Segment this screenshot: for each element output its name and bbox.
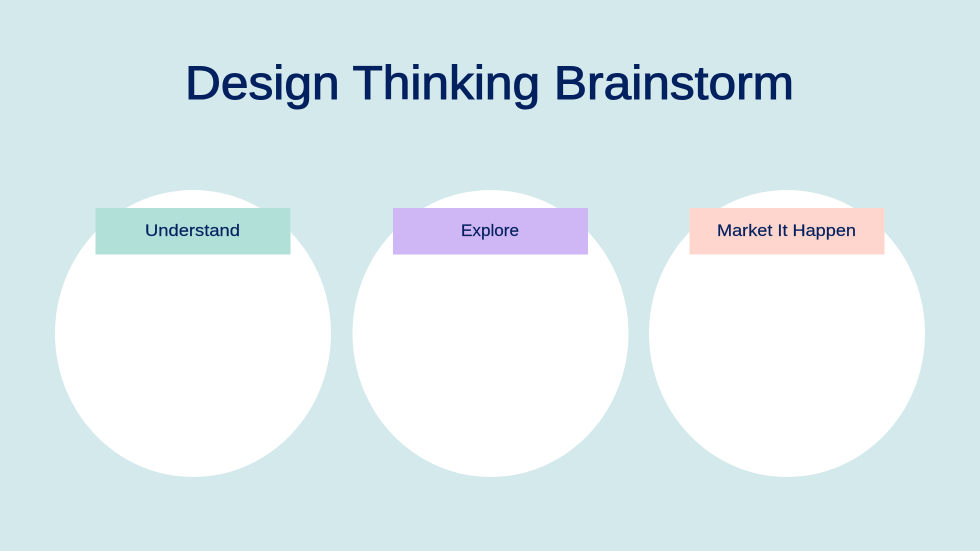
circle: understand	[55, 190, 331, 477]
circle: explore	[352, 190, 628, 477]
label box: explore	[393, 208, 588, 254]
circle: market it happen	[649, 190, 925, 477]
label box: understand	[96, 208, 290, 254]
panel: explore	[352, 190, 628, 477]
label text: market it happen: Market It Happen	[717, 221, 856, 240]
label box: market it happen	[690, 208, 884, 254]
label text: explore: Explore	[461, 221, 519, 240]
panel: understand	[55, 190, 331, 477]
label text: understand: Understand	[145, 221, 240, 240]
title: Design Thinking Brainstorm	[185, 56, 794, 109]
panel: market it happen	[649, 190, 925, 477]
